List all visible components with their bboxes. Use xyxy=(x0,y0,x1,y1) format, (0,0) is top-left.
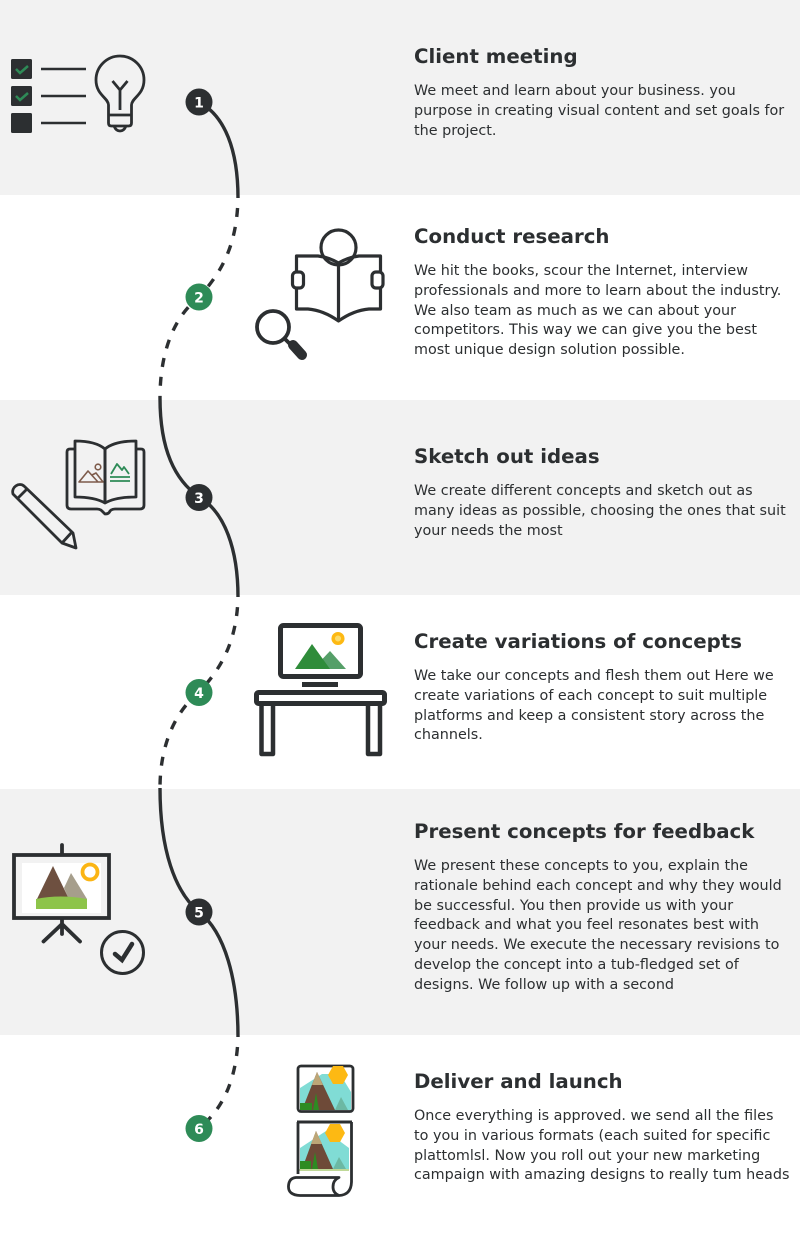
step marker 4: 4 xyxy=(194,686,204,702)
step 1 text: We meet and learn about your business. you xyxy=(414,83,736,99)
step 5 text: designs. We follow up with a second xyxy=(414,977,674,993)
step 2 text: We also team as much as we can about your xyxy=(414,303,736,319)
step 5 text: feedback and what you feel resonates best with xyxy=(414,917,759,933)
step marker 3 xyxy=(186,484,212,511)
step 3 text: many ideas as possible, choosing the ones that suit xyxy=(414,503,786,519)
step marker 2 xyxy=(186,284,212,310)
step marker 3: 3 xyxy=(194,491,204,507)
step 4 text: Create variations of concepts xyxy=(414,630,742,653)
icon: monitor on desk xyxy=(256,626,384,754)
step 5 text: your needs. We execute the necessary revisions to xyxy=(414,937,779,953)
step 1 text: Client meeting xyxy=(414,45,578,68)
step 2 text: We hit the books, scour the Internet, interview xyxy=(414,263,748,279)
step 6 text: Deliver and launch xyxy=(414,1070,623,1093)
step 5 text: We present these concepts to you, explain the xyxy=(414,858,748,874)
step 4 text xyxy=(414,630,774,743)
step 6 text xyxy=(414,1070,789,1183)
step marker 6 xyxy=(186,1115,212,1142)
step 1 text: the project. xyxy=(414,123,496,139)
step 6 text: plattomlsl. Now you roll out your new marketing xyxy=(414,1148,760,1164)
step 3 text: your needs the most xyxy=(414,523,563,539)
step 4 text: platforms and keep a consistent story across the xyxy=(414,708,764,724)
step 2 text: professionals and more to learn about the industry. xyxy=(414,283,781,299)
step 6 text: to you in various formats (each suited for specific xyxy=(414,1128,770,1144)
step marker 5: 5 xyxy=(194,906,204,922)
step 5 text: Present concepts for feedback xyxy=(414,820,754,843)
band: step 3 background xyxy=(0,400,800,595)
step 5 text xyxy=(414,820,782,993)
step 4 text: We take our concepts and flesh them out Here we xyxy=(414,668,774,684)
step 4 text: channels. xyxy=(414,727,483,743)
band: step 5 background xyxy=(0,789,800,1035)
step 2 text: Conduct research xyxy=(414,225,609,248)
step 6 text: campaign with amazing designs to really tum heads xyxy=(414,1167,789,1183)
step marker 5 xyxy=(186,898,212,926)
step 6 text: Once everything is approved. we send all the files xyxy=(414,1108,773,1124)
timeline connector path xyxy=(160,102,238,1128)
step 1 text xyxy=(414,45,784,139)
step 4 text: create variations of each concept to suit multiple xyxy=(414,688,767,704)
icon: presentation board and check xyxy=(14,845,144,974)
step marker 1: 1 xyxy=(194,96,204,112)
step marker 1 xyxy=(186,88,212,116)
step 3 text: We create different concepts and sketch out as xyxy=(414,483,753,499)
step 2 text xyxy=(414,225,781,358)
step marker 2: 2 xyxy=(194,290,204,306)
step 3 text: Sketch out ideas xyxy=(414,445,600,468)
icon: printed image poster xyxy=(288,1066,353,1196)
step 3 text xyxy=(414,445,786,539)
step 2 text: competitors. This way we can give you the best xyxy=(414,322,757,338)
step marker 6: 6 xyxy=(194,1122,204,1138)
step 5 text: be successful. You then provide us with your xyxy=(414,898,733,914)
step 2 text: most unique design solution possible. xyxy=(414,342,685,358)
step 5 text: develop the concept into a tub-fledged set of xyxy=(414,957,739,973)
step 5 text: rationale behind each concept and why they would xyxy=(414,878,782,894)
band: step 1 background xyxy=(0,0,800,195)
icon: checklist and light bulb xyxy=(11,56,144,133)
icon: sketchbook and pencil xyxy=(13,441,144,548)
step marker 4 xyxy=(186,679,212,706)
step 1 text: purpose in creating visual content and set goals for xyxy=(414,103,784,119)
icon: person reading and magnifier xyxy=(257,230,383,355)
